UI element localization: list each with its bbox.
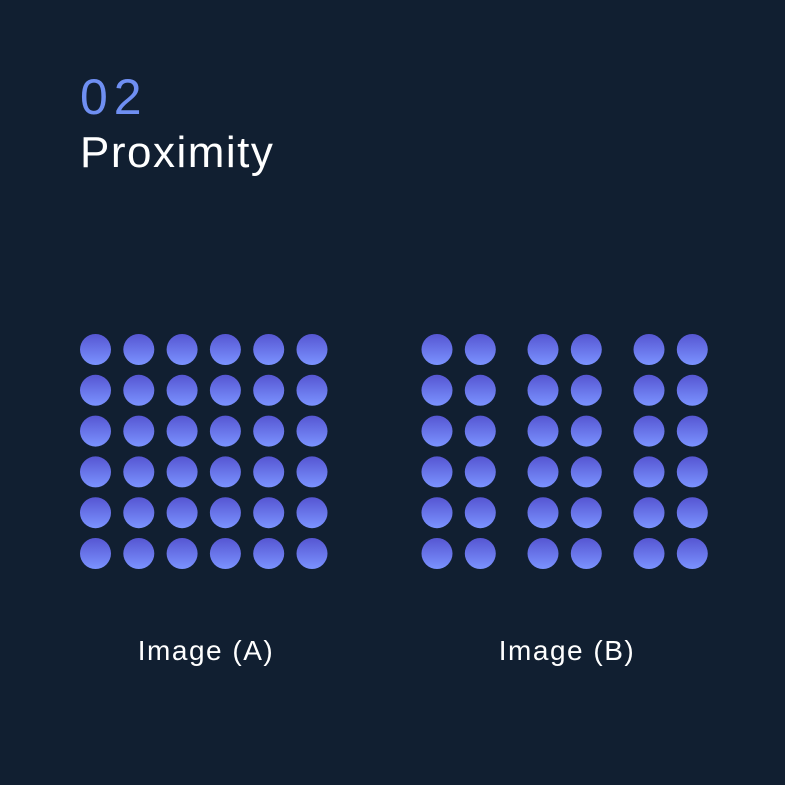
number: 02: [80, 69, 148, 125]
grid A: [80, 334, 328, 569]
label B: Image (B): [499, 635, 635, 666]
grid B: [422, 334, 708, 569]
label A: Image (A): [138, 635, 274, 666]
title: Proximity: [80, 128, 274, 177]
